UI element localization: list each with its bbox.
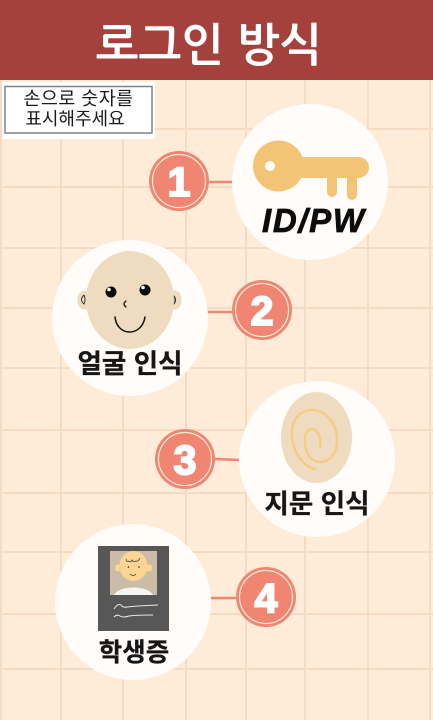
icon: key: [253, 140, 369, 200]
title: 로그인 방식: [96, 22, 322, 68]
instruction note: 손으로 숫자를: [23, 85, 134, 111]
number badge 4: 4: [255, 575, 278, 621]
number badge 2: 2: [251, 288, 273, 334]
connector lines: [206, 182, 241, 598]
number badge 3: [155, 429, 215, 489]
instruction note: [2, 82, 155, 139]
label: 학생증: 학생증: [99, 632, 169, 669]
number badge 1: [149, 151, 209, 211]
label: ID/PW: ID/PW: [262, 202, 367, 239]
label: 지문 인식: 지문 인식: [265, 482, 369, 521]
item 2: face recognition: [52, 240, 208, 396]
instruction note: 표시해주세요: [25, 105, 125, 131]
icon: student ID card: [98, 546, 169, 631]
number badge 4: [236, 567, 296, 627]
icon: fingerprint: [281, 392, 352, 483]
icon: face: [78, 251, 182, 349]
item 3: fingerprint recognition: [239, 381, 395, 537]
number badge 1: 1: [168, 159, 190, 205]
title banner: [0, 0, 433, 80]
item 4: student ID: [55, 524, 211, 680]
number badge 3: 3: [174, 437, 196, 483]
label: 얼굴 인식: 얼굴 인식: [78, 342, 182, 381]
item 1: ID/PW: [232, 104, 388, 260]
number badge 2: [232, 280, 292, 340]
